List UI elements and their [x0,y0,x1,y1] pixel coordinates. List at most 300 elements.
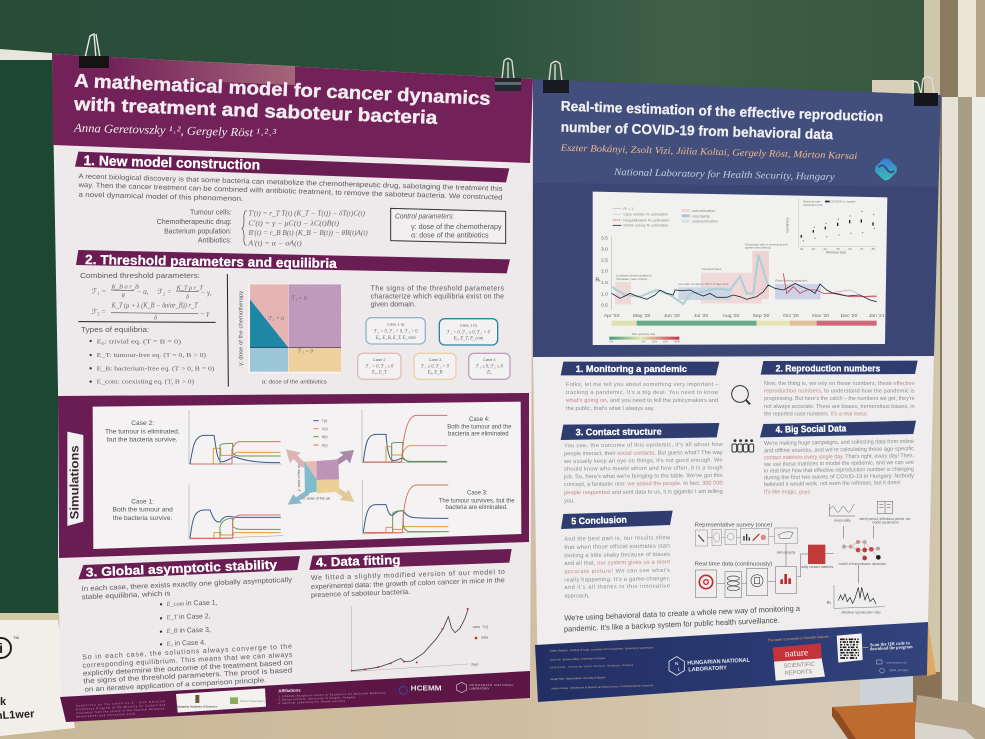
arrow to case 3 [335,487,354,502]
poster 1 paper [52,54,533,722]
chart annotations: Imported cases [701,267,722,271]
icon: group of people [732,439,754,452]
chart legend: Online survey Rₜ estimation [623,224,668,228]
hungarian national laboratory logo, poster 2: LABORATORY [688,665,727,673]
positivity colour legend: 5% [642,340,646,344]
control parameters box: γ: dose of the chemotherapy [411,224,502,231]
poster 1 footer funding text: Excellence Program of the Ministry for Culture and [76,703,166,711]
text: conclusion: and it's all thanks to this innovative [564,584,670,591]
poster 1 title: with treatment and saboteur bacteria [73,93,438,128]
case 1 text: the bacteria survive. [113,515,173,522]
threshold signs text: The signs of the threshold parameters [371,286,504,293]
chart annotations: Global testing capacities [775,278,808,282]
poster 2: COVID-19 reproduction number [533,79,941,702]
chart axes and labels: 1.0 [601,291,608,297]
text: reproduction numbers: progressing. But here's the catch – the numbers we get, they're [764,396,915,402]
table and cardboard box [832,695,985,739]
chart axes and labels: Sep '20 [753,313,770,319]
inset scatter chart [785,198,877,255]
types of equilibria: E_com: coexisting eq. (T, B > 0) [97,379,194,386]
chart axes and labels: 3.0 [601,246,608,252]
binder clip 4 [912,77,938,106]
control parameters box: Control parameters: [395,213,454,220]
QR code [837,633,863,663]
hungarian national laboratory logo, poster 2: HUNGARIAN NATIONAL [687,658,751,667]
case box 4: Case 4 [483,357,496,362]
scientific reports badge: SCIENTIFIC [783,662,815,670]
section 4 paragraph: We fitted a slightly modified version of our model to [311,569,505,582]
case 2 chart [189,410,282,464]
simulations legend: A(t) [322,443,328,447]
poster 2 institution: National Laboratory for Health Security, Hungary [613,167,835,183]
diagram small labels: daily contact matrices [801,565,834,569]
heading: big social data: 4. Big Social Data [776,423,847,435]
section 1 paragraph: A recent biological discovery is that some bacteria can metabolize the chemotherapeutic drug, sabotaging the treatment this [78,173,503,193]
chart axes and labels: 2.0 [601,269,608,275]
case 1 text: Case 1: [131,498,154,505]
case box 1b: ℱ₁ > 0, ℱ₂ ≤ 0, ℱ₃ > 0 [447,329,491,335]
hungarian national laboratory logo, poster 1: LABORATORY [469,686,489,690]
chart annotations: (hospitals, case counts) [616,277,647,281]
poster 1: cancer dynamics [52,54,533,722]
region: teal triangle [250,299,288,348]
section 1 heading [75,152,509,182]
text: contact structure: people responded and sent data to us, it is gigantic I am telling [564,489,723,496]
text: contact structure: concept, a fantastic one: we asked the people. In fact, 300 000 [564,481,723,488]
region diagram [239,283,342,385]
text: big social data: It's like magic, guys. [764,489,812,495]
poster 1 affiliations: 3. National Laboratory for Health Security [278,700,346,705]
QR call to action: Scan the QR code to [870,641,911,648]
arrow to case 2 [286,449,307,468]
positivity colour legend [609,332,681,344]
combined threshold parameters: θ [122,292,125,299]
case 3 text: The tumour survives, but the [439,498,515,504]
section 4 paragraph: experimental data: the growth of colon cancer in mice in the [311,577,505,591]
section 3 bullet list: E_B in Case 3, [166,627,211,635]
poster 1 title: A mathematical model for cancer dynamics [74,70,491,109]
chart axes and labels: Aug '20 [723,313,740,319]
main Rt chart panel [593,192,887,345]
seasonality wave and book icons [829,501,893,583]
case box 2: E₀, E_T [371,371,387,376]
heading: contact structure: 3. Contact structure [576,427,662,437]
threshold signs text: given domain. [371,302,416,309]
chart axes and labels: Oct '20 [783,313,799,319]
poster 2 footer author affiliations [550,646,654,690]
HCEMM logo: HCEMM [411,686,442,693]
section 3 bullet list: E_T in Case 2, [166,613,211,621]
section 4 heading: 4. Data fitting [316,553,401,570]
case 2 text: Case 2: [131,420,154,427]
poster 2 footer author affiliations: Zsolt Vizi · Bolyai Institute, University of Szeged [550,657,606,662]
types of equilibria [81,327,214,386]
sign text: k [0,696,7,708]
effective reproduction mini chart [827,585,885,608]
pipeline diagram [695,501,911,614]
case box 2: Case 2 [373,357,386,362]
chart axes and labels: 3.5 [601,235,608,241]
diagram small labels: model parameters [872,521,899,525]
case box 1b: E₀, E_T, E_com [453,337,484,342]
chart annotations: Lockdown-driven epidemic [616,274,652,278]
inset scatter chart: 80 [872,247,875,251]
combined threshold parameters: δ [154,314,158,321]
text: conclusion: really happening. It's a game-changer, [564,576,670,584]
text: conclusion: that when those official estimates start [564,544,670,551]
poster 2 title: Real-time estimation of the effective reproduction [561,98,884,124]
model equation labels: Chemotherapeutic drug: [157,219,232,226]
poster 2 footer author affiliations: Márton Karsai · Department of Network and Data Science, Central European University [552,684,654,690]
control parameters box [391,208,506,243]
poster 2 header band [533,79,941,357]
text: big social data: believed it would work, not even the referees, but it does! [764,480,901,488]
case 3 chart [362,480,449,534]
text: monitoring a pandemic: Folks, let me tell you about something very important – [566,382,719,388]
inset scatter chart: Goodness [785,217,789,233]
representative survey row [695,523,798,546]
types of equilibria: E₀: trivial eq. (T = B = 0) [97,339,181,346]
case 3 text: bacteria are eliminated. [446,505,508,511]
case 3 text: Case 3: [467,490,488,496]
case box 3 [414,353,456,379]
poster 2 title: number of COVID-19 from behavioral data [561,119,833,142]
scientific reports badge: The paper is accepted to Scientific Reports [767,635,829,642]
poster 2 paper [533,350,934,702]
hungarian national laboratory logo, poster 1 [457,682,514,693]
text: conclusion: And the best part is, our results show [564,535,671,543]
section 3 bullet list: E_com in Case 1, [166,600,218,608]
section 3 intro [81,577,293,601]
chart legend: Case number Rₜ estimation [623,213,668,217]
poster 2 footer band [535,622,928,702]
region: pink [250,284,288,348]
diagram small labels: latent period, infectious period, etc. [860,517,911,521]
data fitting chart: T(t) [482,625,488,629]
diagram small labels: effective reproduction ratio [841,610,881,614]
heading: monitoring a pandemic [561,362,719,375]
text: monitoring a pandemic: tracking a pandemic. It's a big deal. You need to know [566,390,719,396]
case 1 text [113,498,173,522]
poster 1 affiliations: 1. HCEMM (Hungarian Centre of Excellence for Molecular Medicine) [278,692,385,698]
chart legend: underestimation [692,220,718,224]
text: conclusion [564,535,671,599]
chart axes and labels: May '20 [633,313,651,319]
section 3 conclusion paragraph: the signs of the threshold parameters. The proof is based [83,667,293,685]
combined threshold parameters: ℱ₁ = [92,287,106,295]
QR call to action: @lab_hungary [889,668,909,672]
text: reproduction numbers [764,381,915,417]
simulations label [67,432,83,526]
section 2 heading: 2. Threshold parameters and equilibria [85,252,337,271]
poster 2 footer author affiliations: Gergely Röst · Bolyai Institute, University of Szeged [550,676,606,681]
poster 1 simulations band [58,393,529,558]
threshold signs text: characterize which equilibria exist on the [371,294,504,301]
text: conclusion: accurate picture! We can see what's [564,568,670,575]
arrow to case 1 [288,490,309,505]
section 3 intro: In each case, there exists exactly one globally asymptotically [81,577,293,593]
chart annotations: government testing [745,245,771,249]
icon: health security logo [873,156,899,183]
simulations white panel [93,402,521,549]
scientific reports badge: REPORTS [785,669,813,677]
section 1 paragraph: way. Then the cancer treatment can be combined with antibiotic treatment, to remove the saboteur bacteria. We constructed [77,182,503,202]
chart axes and labels: Rₜ [595,277,601,283]
simulations legend: T(t) [322,419,327,423]
model equations: B′(t) = r_B B(t) (K_B − B(t)) − θB(t)A(t) [248,229,368,237]
combined threshold parameters [80,273,212,321]
region diagram: ℱ₂ = 0 [297,348,313,355]
text: contact structure: should know who meets whom and how often, it is a tough [564,465,723,473]
chart axes and labels: Nov '20 [812,313,829,319]
heading: contact structure [561,423,719,440]
inset scatter chart: Distribution shift [803,203,822,207]
poster 1 affiliations: 2. Bolyai Institute, University of Szeged, Hungary [278,696,356,702]
chart legend: Rₜ = 1 [623,207,633,211]
chart legend: Hospitalization Rₜ estimation [623,218,670,222]
region diagram: ℱ₁ = 0 [291,294,307,301]
chart axes and labels [595,235,885,319]
case 3 text [439,490,515,511]
binder clip 3 [543,62,569,93]
case box 1a: Case 1 a) [387,321,405,326]
central phase diagram with arrows: α: dose of the ab. [302,496,331,500]
section 4 heading [309,549,512,570]
poster 2 footer author affiliations: Júlia Koltai · Centre for Social Sciences, Budapest, Hungary [550,664,634,669]
heading: monitoring a pandemic: 1. Monitoring a pandemic [576,364,687,374]
positivity colour legend: 10% [652,340,658,344]
poster 1 footer funding text [76,699,166,719]
poster 1 footer logos [176,688,266,713]
combined threshold parameters: ℱ₂ = [157,288,172,296]
heading: conclusion: 5 Conclusion [571,515,627,526]
simulations legend: B(t) [322,435,328,439]
types of equilibria: Types of equilibria: [81,327,149,334]
poster 1 footer funding text: Supported by the UNKP-20-5 - New National [76,699,166,708]
scientific reports badge: nature [785,648,808,660]
text: contact structure [563,442,724,505]
case box 3: E₀, E_B [427,371,443,376]
poster 1 affiliations: Affiliations [278,688,301,693]
chart axes and labels: Apr '20 [604,313,620,319]
poster 1 footer logos: Partner Organisation [240,699,265,703]
hungarian national laboratory logo, poster 2: N [675,661,679,667]
region: orange [288,348,341,372]
hungarian national laboratory logo, poster 2 [669,657,751,675]
model equations: C′(t) = γ − μC(t) − λC(t)B(t) [248,219,340,227]
inset scatter chart: 30 [812,247,815,251]
case 4 chart [362,409,448,463]
section 3 conclusion paragraph: corresponding equilibrium. This means that we can always [82,652,293,670]
text: contact structure: we usually keep an eye on things, it's not good enough. We [563,458,723,465]
section 1 paragraph [77,173,503,203]
positivity colour legend: 15% [663,340,669,344]
case 1 chart [189,484,283,539]
case 4 text: Both the tumour and the [447,424,512,430]
real time data row: Real time data (continuously) [695,561,773,567]
model equation labels [157,210,232,245]
case 4 text [447,417,512,438]
model equation labels: Bacterium population: [164,228,232,235]
chart annotations: Temporary rise in screening and [745,242,788,246]
positivity colour legend: >25% [673,340,681,344]
inset scatter chart: Window size [826,251,846,255]
diagram small labels: seasonality [834,518,851,522]
combined threshold parameters: K_T μ r_T [176,284,203,291]
poster 1 authors: Anna Geretovszky ¹˒², Gergely Röst ¹˒²˒³ [73,121,277,140]
section 3 conclusion paragraph [82,643,293,694]
poster 2 authors: Eszter Bokányi, Zsolt Vizi, Júlia Koltai, Gergely Röst, Márton Karsai [559,143,858,162]
poster 1 header glare [110,57,295,85]
chart legend: uncertainty [692,214,710,218]
heading: reproduction numbers [761,361,918,375]
text: contact structure: job. So, here's what we're bringing to the table. We've got this [563,473,723,480]
poster 1 footer band [60,671,530,722]
combined threshold parameters: K_T (μ + λ (K_B − δα/σr_B)) r_T [111,301,199,309]
QR call to action: scientistas.edu [887,660,907,664]
positivity heat strip [612,321,877,326]
section 3 heading: 3. Global asymptotic stability [86,558,277,580]
central phase diagram with arrows: γ: dose of the ch. [297,463,301,491]
sign trademark: TM [13,635,19,640]
combined threshold parameters: − γ, [201,289,212,297]
real time data row [695,543,834,598]
combined threshold parameters: ℱ₃ = [92,308,106,316]
section 3 conclusion paragraph: explicitly determine the outcome of the treatment based on [83,660,293,678]
poster 1 footer funding text: Innovation from the source of the National Research, [76,706,166,715]
section 4 paragraph: presence of saboteur bacteria. [311,589,410,599]
poster 2 footer curl [927,622,936,676]
diagram small labels: demography [777,550,796,554]
case 2 text: The tumour is eliminated, [105,428,180,435]
text: contact structure: You see, the outcome of this epidemic, it's all about how [564,442,724,449]
chart axes and labels: Jan '21 [869,313,885,319]
model equations [242,210,368,247]
simulations legend: C(t) [322,427,328,431]
case box 2: ℱ₁ > 0, ℱ₃ ≤ 0 [365,364,394,370]
combined threshold parameters: K_B σ r_B [111,283,139,290]
binder clip 1 [79,34,109,68]
heading: conclusion [561,511,673,529]
hungarian national laboratory logo, poster 2: L [678,667,681,673]
text: big social data: during the first two waves of COVID-19 in Hungary. Nobody [764,473,914,481]
representative survey row: Representative survey (once) [695,523,773,529]
chart axes and labels: Jul '20 [694,313,708,319]
QR call to action: download the program [870,645,913,652]
combined threshold parameters: − γ [200,309,209,317]
text: conclusion: approach. [564,593,590,599]
poster 1 footer funding text: Development and Innovation Fund. [76,712,136,719]
case box 3: ℱ₁ ≤ 0, ℱ₂ > 0 [421,364,450,370]
region: light blue [250,348,288,372]
case 1 text: Both the tumour and [113,506,173,513]
model equation labels: Tumour cells: [190,210,232,217]
combined threshold parameters: Combined threshold parameters: [80,273,200,280]
heading: big social data [760,421,916,437]
sign at bottom left [0,620,75,736]
combined threshold parameters: − α, [137,288,149,296]
case box 1a [366,318,425,344]
text: reproduction numbers: not always accurate. There are biases, tremendous biases, in [764,404,915,410]
case 4 text: bacteria are eliminated [448,432,509,438]
poster 1 title [73,70,491,128]
control parameters box: α: dose of the antibiotics [411,232,489,239]
case box 4: E₀ [486,371,492,376]
combined threshold parameters: δ [186,293,190,300]
chart legend [613,207,718,228]
inset scatter chart: 50 [837,247,840,251]
section 3 conclusion paragraph: on an iterative application of a comparison principle. [84,677,267,694]
text: conclusion: and all that, our system gives us a more [564,560,670,567]
case box 1b [439,319,498,345]
text: reproduction numbers: the reported case numbers. It's a real mess. [764,411,868,417]
text: contact structure: people interact, their social contacts. But guess what? The way [564,450,723,457]
section 3 conclusion paragraph: So in each case, the solutions always converge to the [82,643,292,661]
case box 1a: ℱ₁ > 0, ℱ₂ > 0, ℱ₃ > 0 [374,329,418,335]
chart legend: overestimation [692,209,715,213]
text: big social data: We're making huge campaigns, and collecting data from online [764,439,914,447]
chart annotations [616,242,808,286]
text: conclusion: looking a little shaky because of biases [564,552,670,559]
positivity colour legend: 0% [609,340,614,344]
text: monitoring a pandemic: what's going on, and you need to tell the policymakers and [565,398,718,404]
data fitting chart: days [471,662,479,666]
simulations label: Simulations [67,445,81,519]
inset scatter chart: 40 [823,247,827,251]
chart annotations: low case numbers (<50 in 3 days low) [678,282,728,286]
case box 1b: Case 1 b) [460,322,478,327]
chart axes and labels: 1.5 [601,280,608,286]
simulations legend [313,419,328,447]
case box 4: ℱ₁ ≤ 0, ℱ₂ ≤ 0 [476,364,504,370]
inset scatter chart: Reported case [803,200,821,204]
chart axes and labels: Dec '20 [841,313,858,319]
chart axes and labels: 0.5 [601,302,608,308]
chart axes and labels: 2.5 [601,257,608,263]
diagram small labels [777,517,911,614]
section 3 intro: stable equilibria, which is [81,590,171,601]
chart shaded annotation regions [615,251,821,304]
case box 3: Case 3 [429,357,442,362]
types of equilibria: E_B: bacterium-free eq. (T > 0, B = 0) [97,365,214,372]
section 1 heading: 1. New model construction [83,152,260,173]
poster 2 footer author affiliations: Eszter Bokányi · Institute of Logic, Language and Computation, University of Amsterdam [550,646,653,653]
hungarian national laboratory logo, poster 1: HUNGARIAN NATIONAL [469,683,514,687]
text: big social data [763,439,914,495]
region diagram: α: dose of the antibiotics [262,379,327,385]
poster 1 header band [52,54,533,163]
text: monitoring a pandemic [565,382,719,412]
text: big social data: and offline sources, and we're calculating these age-specific [764,446,914,454]
section 4 paragraph [311,569,505,599]
model equation labels: Antibiotics: [198,238,232,245]
inset scatter chart: 70 [860,247,864,251]
text: reproduction numbers: reproduction numbers, to understand how the pandemic is [764,389,915,395]
summary statement: pandemic. It's like a backup system for public health surveillance. [564,616,780,634]
arrow to case 4 [334,450,354,466]
effective reproduction mini chart: Rₜ [827,600,831,605]
contact matrix heatmap [808,545,825,564]
model equations: A′(t) = α − σA(t) [247,239,302,247]
sign text [0,696,35,722]
model equations: T′(t) = r_T T(t) (K_T − T(t)) − δT(t)C(t) [248,210,366,218]
text: reproduction numbers: Now, the thing is, we rely on these numbers, these effective [764,381,915,387]
case 2 text: but the bacteria survive. [107,437,178,444]
case 4 text: Case 4: [469,417,490,423]
chart data lines [612,255,877,304]
central phase diagram with arrows [286,449,354,505]
divider lines [78,274,228,387]
